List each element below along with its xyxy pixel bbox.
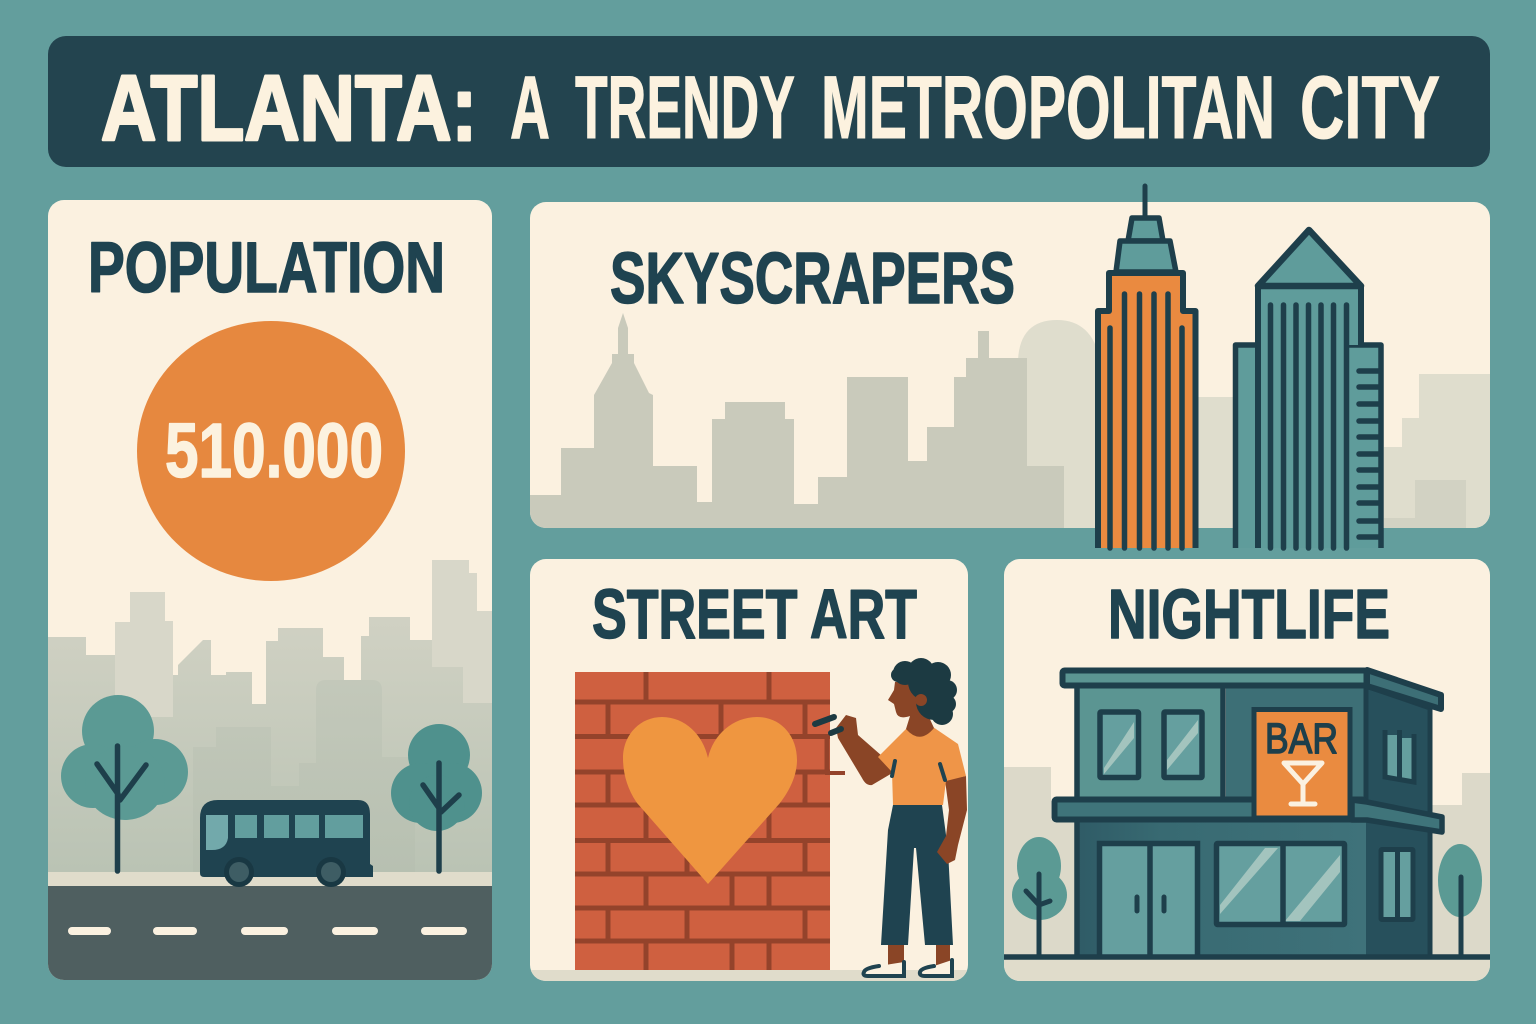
right arm bbox=[937, 776, 967, 864]
title text: TRENDY bbox=[575, 57, 795, 157]
icon: teal skyscraper bbox=[1236, 230, 1381, 548]
shirt bbox=[878, 727, 966, 805]
panel: population bbox=[48, 200, 492, 980]
title text: CITY bbox=[1300, 57, 1440, 157]
panel: nightlife bbox=[1004, 559, 1490, 981]
road bbox=[48, 886, 492, 980]
bar sign bbox=[1254, 710, 1350, 818]
roof bbox=[1062, 670, 1366, 686]
trousers bbox=[881, 805, 953, 945]
title banner bbox=[48, 36, 1490, 167]
icon: bus bbox=[200, 800, 373, 887]
ground line bbox=[1004, 954, 1490, 960]
upper walls bbox=[1077, 684, 1223, 802]
heading: population: POPULATION bbox=[88, 229, 445, 308]
icon: left tree bbox=[61, 695, 188, 871]
panel: street art bbox=[530, 559, 968, 981]
background buildings bbox=[1004, 767, 1490, 957]
icon: cocktail glass bbox=[1284, 763, 1322, 804]
lower legs bbox=[888, 945, 950, 966]
doors bbox=[1100, 844, 1198, 957]
sidewalk bbox=[1004, 958, 1490, 981]
icon: right small tree bbox=[1438, 844, 1482, 957]
heading: nightlife: NIGHTLIFE bbox=[1108, 575, 1390, 653]
population circle with number: 510.000 bbox=[165, 408, 383, 494]
neck and head bbox=[888, 680, 934, 737]
brick wall bbox=[575, 672, 830, 970]
title text: A bbox=[510, 57, 550, 157]
chalk bbox=[815, 717, 841, 733]
bar sign: BAR bbox=[1265, 715, 1338, 763]
ledge bbox=[1054, 800, 1364, 820]
paint drip ledge bbox=[825, 771, 845, 775]
icon: right tree bbox=[391, 724, 482, 871]
heading: skyscrapers: SKYSCRAPERS bbox=[610, 239, 1015, 319]
icon: orange skyscraper bbox=[1098, 186, 1196, 548]
icon: heart mural bbox=[623, 717, 797, 884]
side lower window bbox=[1381, 850, 1413, 920]
population circle with number bbox=[137, 321, 405, 581]
title text: ATLANTA: bbox=[101, 56, 477, 160]
ground floor bbox=[1077, 820, 1366, 957]
panel: skyscrapers bbox=[530, 186, 1490, 548]
shoes bbox=[864, 960, 952, 976]
hair bbox=[891, 658, 957, 725]
faded dome and distant towers bbox=[1018, 320, 1490, 528]
sidewalk bbox=[48, 872, 492, 886]
upper windows bbox=[1100, 712, 1202, 778]
bar building bbox=[1004, 670, 1490, 957]
background skyline bbox=[48, 560, 492, 872]
shirt creases bbox=[892, 761, 945, 780]
title text bbox=[101, 56, 1440, 160]
title text: METROPOLITAN bbox=[821, 57, 1275, 157]
figure: street artist bbox=[815, 658, 967, 976]
left arm bbox=[836, 715, 894, 785]
icon: left small tree bbox=[1012, 837, 1067, 957]
storefront window bbox=[1216, 844, 1344, 924]
side upper window bbox=[1385, 730, 1414, 782]
grey skyline bbox=[530, 313, 1064, 528]
heading: street art: STREET ART bbox=[592, 575, 917, 653]
